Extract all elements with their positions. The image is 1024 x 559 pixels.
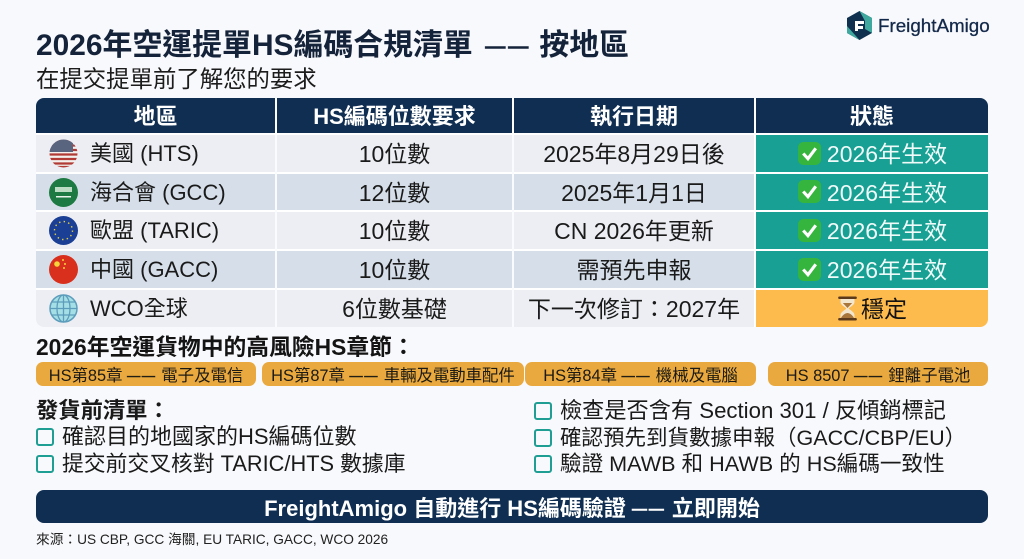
table: CN 2026年更新 [554,218,714,244]
icon: EU flag [49,216,78,245]
text: HS第85章 —— 電子及電信 [49,367,243,385]
icon: US flag [50,140,78,168]
checklist: right column [534,398,966,476]
heading: pre-shipment checklist: 發貨前清單： [36,398,170,423]
checklist: left column: 確認目的地國家的HS編碼位數 [62,424,357,449]
icon: globe [49,294,78,323]
source note: 來源：US CBP, GCC 海關, EU TARIC, GACC, WCO 2026 [36,532,388,547]
title: 2026年空運提單HS編碼合規清單 —— 按地區 [36,29,629,62]
call to action banner [36,490,988,523]
icon: Saudi flag [49,178,78,207]
table: 地區 [133,104,178,128]
table: 10位數 [359,218,430,244]
table: 2026年生效 [827,218,947,244]
icon: China flag [49,255,78,284]
heading: high-risk HS chapters: 2026年空運貨物中的高風險HS章節： [36,334,415,360]
table: 需預先申報 [576,257,692,283]
table: 2025年1月1日 [561,180,707,206]
checklist: right column: 驗證 MAWB 和 HAWB 的 HS編碼一致性 [560,451,945,476]
table: HS編碼位數要求 [313,104,476,128]
checklist: right column: 確認預先到貨數據申報（GACC/CBP/EU） [560,426,966,450]
table: 2026年生效 [827,257,947,283]
table: 6位數基礎 [342,296,447,322]
table: 12位數 [359,180,430,206]
table: WCO全球 [90,296,188,321]
table: 執行日期 [590,104,678,128]
table: 2026年生效 [827,180,947,206]
table: 2026年生效 [827,141,947,167]
logo: FreightAmigo [847,11,990,40]
tags: HS chapters [36,362,988,386]
subtitle: 在提交提單前了解您的要求 [36,66,317,92]
call to action banner: FreightAmigo 自動進行 HS編碼驗證 —— 立即開始 [264,496,760,520]
checklist: left column [36,424,406,476]
table: 海合會 (GCC) [90,180,226,204]
checklist: left column: 提交前交叉核對 TARIC/HTS 數據庫 [62,451,406,476]
checklist: right column: 檢查是否含有 Section 301 / 反傾銷標記 [560,398,946,423]
text: HS第87章 —— 車輛及電動車配件 [271,367,515,385]
logo: FreightAmigo: FreightAmigo [878,15,990,36]
table: 中國 (GACC) [90,257,218,282]
table: 狀態 [850,104,894,128]
text: HS第84章 —— 機械及電腦 [543,367,738,385]
table: 歐盟 (TARIC) [90,218,219,243]
table: 10位數 [359,257,430,283]
table: 10位數 [359,141,430,167]
table: 美國 (HTS) [90,141,199,166]
table [36,98,988,327]
table: 穩定 [861,296,907,322]
table: 下一次修訂：2027年 [528,296,740,322]
table: 2025年8月29日後 [543,141,725,167]
text: HS 8507 —— 鋰離子電池 [786,367,970,385]
